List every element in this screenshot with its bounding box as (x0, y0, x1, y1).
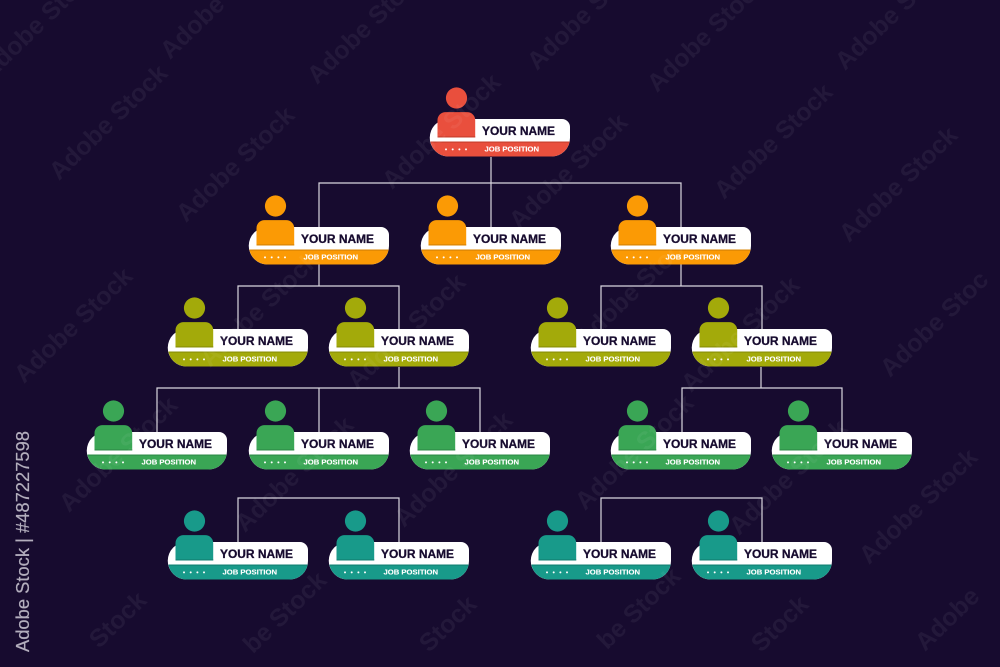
card: level 4 first: JOB POSITION (142, 458, 196, 467)
watermark pattern: Adobe Stock (570, 226, 699, 352)
card: level 5 second (329, 510, 469, 580)
watermark pattern: Adobe Stock (389, 406, 518, 532)
watermark pattern: Adobe Stock (9, 262, 138, 388)
card: level 3 third (531, 297, 671, 366)
watermark pattern: Adobe Stock (570, 389, 699, 515)
card: level 5 first (168, 510, 308, 580)
watermark pattern: be Stock (238, 566, 332, 659)
stock id label: Adobe Stock | #487227598 (13, 431, 33, 652)
card: level 4 third (410, 400, 550, 470)
card: level 3 second: YOUR NAME (381, 334, 454, 348)
watermark pattern: Adobe Stock (854, 443, 983, 569)
watermark pattern: Stock (414, 590, 482, 658)
card: level 2 right: YOUR NAME (663, 232, 736, 246)
card: level 1 executive: JOB POSITION (484, 145, 539, 154)
card: level 3 fourth: YOUR NAME (744, 334, 817, 348)
watermark pattern: Stock (84, 586, 152, 654)
card: level 4 fifth (772, 400, 912, 470)
card: level 3 second: JOB POSITION (384, 355, 438, 364)
card: level 5 third (531, 510, 671, 580)
watermark pattern: Adobe Stock (709, 78, 838, 204)
card: level 2 right: JOB POSITION (666, 253, 720, 262)
card: level 5 first: YOUR NAME (220, 547, 293, 561)
card: level 4 fifth: YOUR NAME (824, 437, 897, 451)
watermark pattern: Adobe Stock (54, 391, 183, 517)
card: level 4 second (249, 400, 389, 470)
card: level 4 fifth: JOB POSITION (826, 458, 881, 467)
card: level 5 second: YOUR NAME (381, 547, 454, 561)
watermark pattern: Adobe Stock (724, 414, 853, 540)
watermark pattern: Adobe Stock (377, 68, 506, 194)
card: level 3 first (168, 297, 308, 366)
card: level 2 centre (421, 195, 561, 264)
card: level 3 second (329, 297, 469, 366)
card: level 2 right (611, 195, 751, 264)
card: level 5 third: JOB POSITION (586, 568, 640, 577)
card: level 3 first: JOB POSITION (222, 355, 277, 364)
card: level 1 executive: YOUR NAME (482, 124, 555, 138)
card: level 4 first: YOUR NAME (139, 437, 212, 451)
watermark pattern: Adobe Stock (230, 411, 359, 537)
watermark pattern: Adobe Stock (171, 101, 300, 227)
watermark pattern: Adobe (910, 582, 985, 656)
card: level 4 second: YOUR NAME (301, 437, 374, 451)
card: level 4 first (87, 400, 227, 470)
watermark pattern: Adobe Stock (676, 271, 805, 397)
watermark pattern: Adobe Stock (504, 108, 633, 234)
card: level 2 centre: YOUR NAME (473, 232, 546, 246)
card: level 3 fourth: JOB POSITION (746, 355, 801, 364)
watermark pattern: Adobe Stock (834, 121, 963, 247)
card: level 3 fourth (692, 297, 832, 366)
connector lines (157, 157, 842, 542)
watermark pattern: Stock (746, 590, 814, 658)
card: level 3 third: YOUR NAME (583, 334, 656, 348)
card: level 4 third: YOUR NAME (462, 437, 535, 451)
card: level 5 fourth: YOUR NAME (744, 547, 817, 561)
card: level 4 second: JOB POSITION (304, 458, 358, 467)
card: level 1 executive (430, 87, 570, 156)
card: level 4 fourth: YOUR NAME (663, 437, 736, 451)
card: level 2 centre: JOB POSITION (476, 253, 530, 262)
card: level 5 second: JOB POSITION (384, 568, 438, 577)
card: level 4 third: JOB POSITION (464, 458, 519, 467)
watermark pattern: Adobe Stoc (875, 266, 994, 382)
card: level 5 first: JOB POSITION (222, 568, 277, 577)
watermark pattern: Adobe Stock (44, 59, 173, 185)
card: level 3 third: JOB POSITION (586, 355, 640, 364)
card: level 5 third: YOUR NAME (583, 547, 656, 561)
card: level 5 fourth: JOB POSITION (746, 568, 801, 577)
card: level 2 left: JOB POSITION (304, 253, 358, 262)
watermark pattern: Adobe Stock (342, 268, 471, 394)
card: level 4 fourth: JOB POSITION (666, 458, 720, 467)
watermark pattern: be Stock (592, 562, 686, 655)
card: level 3 first: YOUR NAME (220, 334, 293, 348)
watermark pattern: Adobe Stock (195, 246, 324, 372)
card: level 2 left (249, 195, 389, 264)
card: level 5 fourth (692, 510, 832, 580)
card: level 4 fourth (611, 400, 751, 470)
card: level 2 left: YOUR NAME (301, 232, 374, 246)
